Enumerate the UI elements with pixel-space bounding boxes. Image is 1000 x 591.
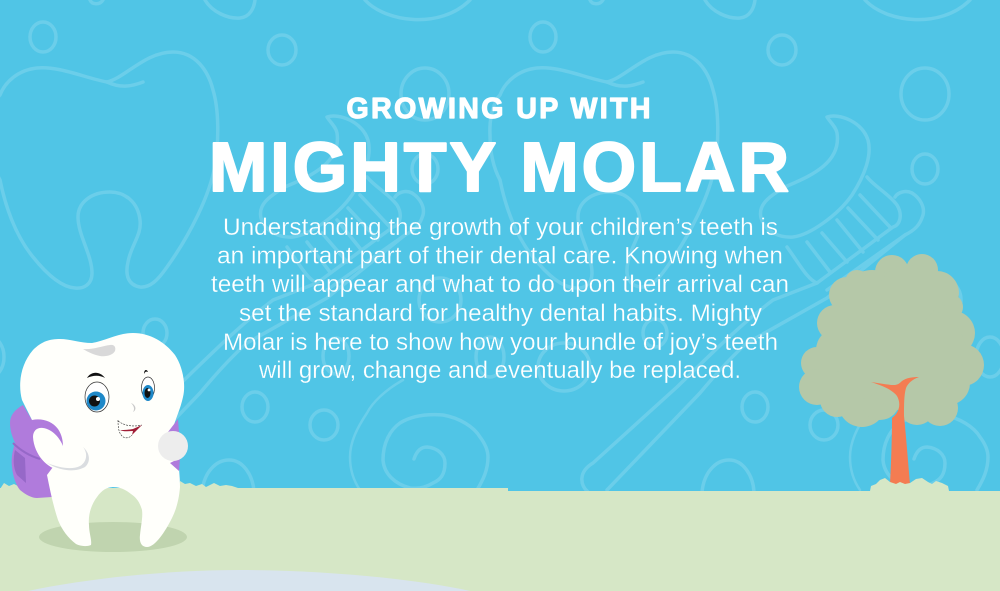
- tree trunk: [871, 377, 919, 484]
- tree foliage: [799, 254, 984, 427]
- character: mighty molar tooth: [10, 333, 188, 552]
- intro text block: teeth will appear and what to do upon their arrival can: [211, 271, 789, 298]
- mouth: [118, 420, 142, 438]
- backpack: [10, 405, 60, 498]
- ground shadow: [39, 522, 187, 552]
- ground: [0, 481, 1000, 591]
- tree grass tuft: [870, 478, 949, 491]
- nose: [131, 403, 135, 412]
- right arm ball with strap: [158, 419, 188, 471]
- pond: [28, 570, 470, 591]
- intro text block: [211, 214, 789, 384]
- left arm with strap: [32, 419, 89, 471]
- intro text block: will grow, change and eventually be replaced.: [258, 357, 741, 384]
- tooth body: [20, 333, 184, 547]
- title: mighty molar: MIGHTY MOLAR: [209, 128, 789, 206]
- tree: [799, 254, 984, 491]
- intro text block: Understanding the growth of your children’s teeth is: [223, 214, 778, 241]
- intro text block: set the standard for healthy dental habits. Mighty: [239, 300, 763, 327]
- intro text block: Molar is here to show how your bundle of joy’s teeth: [223, 329, 778, 356]
- tooth highlight: [83, 345, 115, 356]
- right eye: [142, 370, 154, 401]
- intro text block: an important part of their dental care. Knowing when: [217, 242, 783, 270]
- heading: growing up with: GROWING UP WITH: [346, 93, 650, 125]
- left eye: [85, 373, 109, 412]
